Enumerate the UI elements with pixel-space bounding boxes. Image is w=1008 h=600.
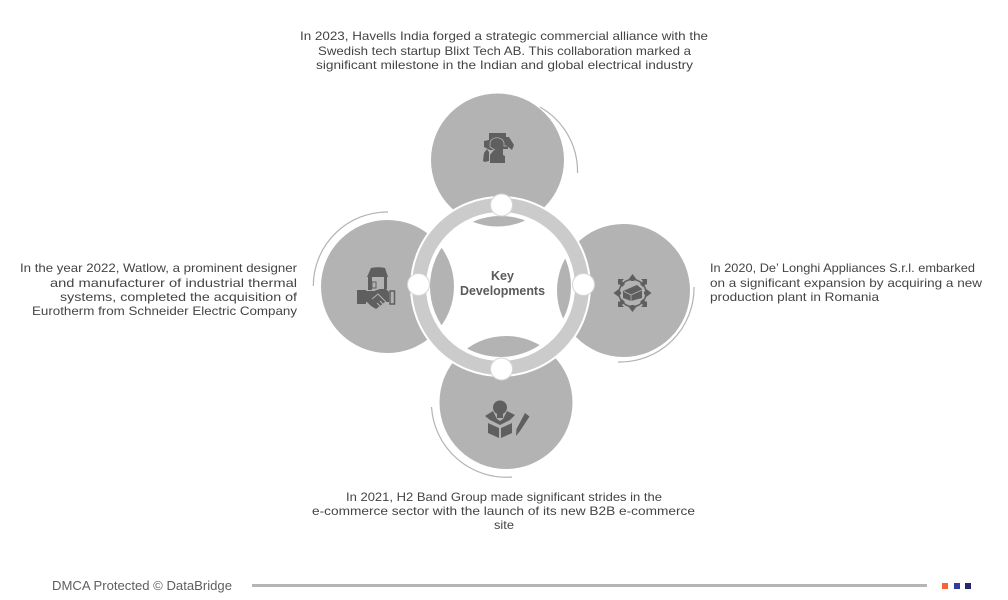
- ring knob: right: [572, 274, 594, 296]
- text block: bottom development: In 2021, H2 Band Group made significant strides in the: [346, 490, 662, 504]
- icon: idea box and pencil: [485, 400, 530, 438]
- center heading: [460, 268, 545, 298]
- center heading: Key: [491, 268, 515, 283]
- accent arc: bottom: [432, 407, 512, 477]
- text block: bottom development: [312, 490, 695, 532]
- icon: puzzle hands: [483, 133, 514, 163]
- text block: left development: Eurotherm from Schneider Electric Company: [32, 304, 297, 318]
- footer: progress bar: [252, 584, 927, 587]
- circle: bottom: [440, 336, 572, 469]
- text block: left development: and manufacturer of industrial thermal: [50, 276, 297, 290]
- text block: top development: significant milestone in the Indian and global electrical industry: [316, 58, 693, 72]
- icon: handshake and shop: [357, 267, 394, 309]
- icon: box with outward arrows: [614, 274, 652, 312]
- text block: left development: In the year 2022, Watlow, a prominent designer: [20, 261, 297, 275]
- ring knob: top: [490, 194, 512, 216]
- accent arc: left: [313, 212, 388, 286]
- accent arc: top: [540, 107, 578, 173]
- circle: top: [431, 94, 564, 226]
- text block: right development: production plant in Romania: [710, 290, 879, 304]
- text block: bottom development: site: [494, 518, 514, 532]
- text block: top development: Swedish tech startup Blixt Tech AB. This collaboration marked a: [318, 44, 691, 58]
- footer: copyright: DMCA Protected © DataBridge: [52, 578, 232, 593]
- text block: left development: [20, 261, 298, 318]
- footer: brand squares: [942, 583, 971, 589]
- text block: top development: In 2023, Havells India forged a strategic commercial alliance with the: [300, 29, 708, 43]
- center heading: Developments: [460, 283, 545, 298]
- text block: right development: on a significant expansion by acquiring a new: [710, 276, 982, 290]
- accent arc: right: [618, 287, 694, 362]
- text block: bottom development: e-commerce sector with the launch of its new B2B e-commerce: [312, 504, 695, 518]
- text block: right development: [710, 261, 982, 304]
- central ring: [419, 205, 582, 368]
- text block: right development: In 2020, De’ Longhi Appliances S.r.l. embarked: [710, 261, 975, 275]
- text block: top development: [300, 29, 708, 72]
- ring knob: bottom: [490, 358, 512, 380]
- circle: left: [321, 220, 454, 353]
- text block: left development: systems, completed the acquisition of: [60, 290, 298, 304]
- circle: right: [557, 224, 690, 357]
- ring knob: left: [408, 274, 430, 296]
